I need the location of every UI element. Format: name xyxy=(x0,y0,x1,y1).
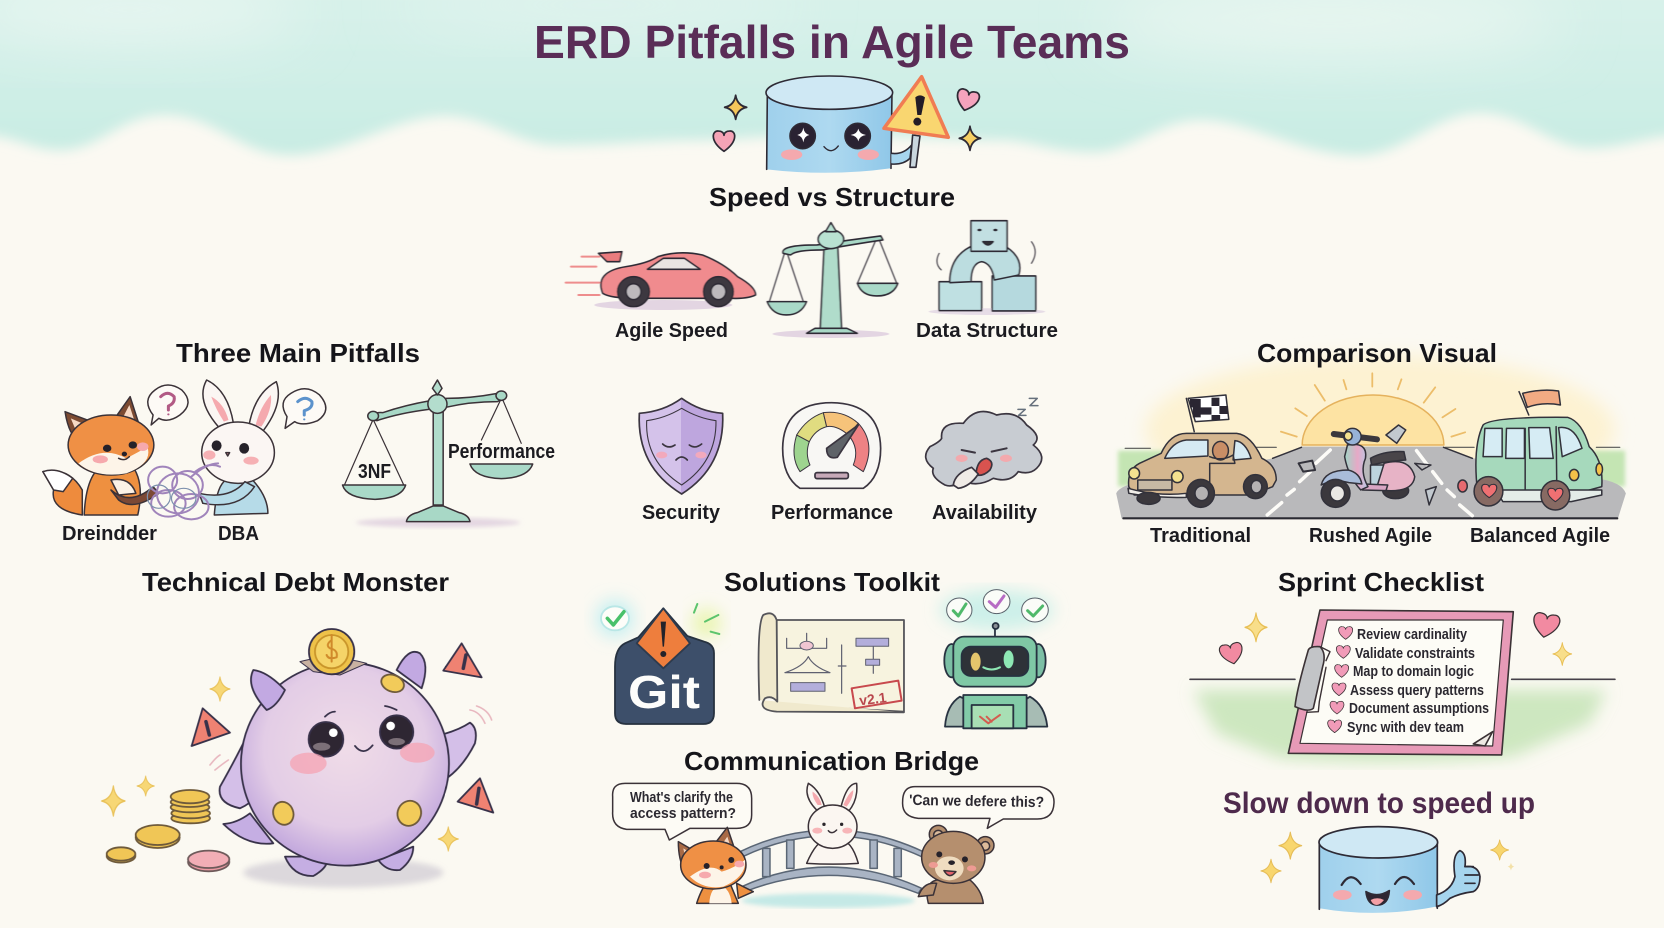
panel: security, performance, availability xyxy=(639,398,1042,524)
label: 3NF: 3NF xyxy=(358,461,391,483)
heading: Technical Debt Monster xyxy=(142,567,449,597)
tagline: Slow down to speed up xyxy=(1223,787,1535,820)
icon: happy database with thumbs up xyxy=(1261,827,1514,913)
speech text: clarify access pattern: access pattern? xyxy=(630,805,736,822)
panel: sprint checklist xyxy=(1190,567,1615,762)
speech text: clarify access pattern: What's clarify the xyxy=(630,789,733,806)
checklist items: Map to domain logic xyxy=(1353,663,1474,680)
title: ERD Pitfalls in Agile Teams xyxy=(534,16,1130,68)
label: agile speed: Agile Speed xyxy=(615,320,728,342)
label: traditional: Traditional xyxy=(1150,525,1251,547)
label: data structure: Data Structure xyxy=(916,320,1058,342)
checklist items: Document assumptions xyxy=(1349,700,1489,717)
illustration: car, scale and blocks xyxy=(566,221,1045,338)
sub: balanced van xyxy=(1458,390,1603,510)
panel: closing message xyxy=(1223,787,1535,913)
checklist items: Validate constraints xyxy=(1355,645,1475,662)
label: DBA: DBA xyxy=(218,523,259,545)
sub: traditional car xyxy=(1128,395,1276,507)
panel: comparison visual xyxy=(1116,338,1626,547)
icons: shield, gauge, cloud xyxy=(639,398,1042,494)
panel: speed vs structure xyxy=(566,182,1058,342)
heading: Sprint Checklist xyxy=(1278,567,1484,597)
label: performance: Performance xyxy=(771,502,893,524)
icon: database mascot with warning sign xyxy=(713,76,981,173)
sub: rushed scooter xyxy=(1299,425,1436,507)
heading: Communication Bridge xyxy=(684,746,979,776)
icons: git badge, blueprint, robot xyxy=(596,590,1053,728)
checklist items xyxy=(1347,626,1489,736)
checklist items: Assess query patterns xyxy=(1350,682,1484,699)
panel: solutions toolkit xyxy=(596,567,1053,728)
sunrise glow backdrop xyxy=(1145,355,1615,505)
checklist items: Review cardinality xyxy=(1357,626,1468,643)
speech text: can we defer: 'Can we defere this? xyxy=(909,792,1044,811)
label: git on badge: Git xyxy=(628,666,700,718)
heading: Comparison Visual xyxy=(1257,338,1497,368)
heading: Speed vs Structure xyxy=(709,182,955,212)
panel: three main pitfalls xyxy=(43,338,555,545)
label: balanced agile: Balanced Agile xyxy=(1470,525,1610,547)
label: security: Security xyxy=(642,502,721,524)
illustration: tilted scale 3NF vs performance xyxy=(343,380,533,528)
illustration: pink clipboard on meadow xyxy=(1190,610,1615,762)
illustration: road, sun, car, scooter and van xyxy=(1116,373,1626,518)
panel: technical debt monster xyxy=(102,567,493,888)
label: availability: Availability xyxy=(932,502,1038,524)
icons: git badge, blueprint, robot: v2.1 xyxy=(858,689,888,708)
checklist items: Sync with dev team xyxy=(1347,719,1464,736)
label: performance on scale: Performance xyxy=(448,441,555,463)
illustration: fox and rabbit with tangled yarn xyxy=(43,380,326,519)
speech text: clarify access pattern xyxy=(630,789,736,822)
label: dreindder: Dreindder xyxy=(62,523,157,545)
panel: communication bridge xyxy=(613,746,1054,908)
illustration: purple monster with coins xyxy=(102,629,493,888)
heading: Three Main Pitfalls xyxy=(176,338,420,368)
heading: Solutions Toolkit xyxy=(724,567,940,597)
illustration: fox, rabbit and bear on a bridge with speech bubbles xyxy=(613,783,1054,908)
label: rushed agile: Rushed Agile xyxy=(1309,525,1432,547)
